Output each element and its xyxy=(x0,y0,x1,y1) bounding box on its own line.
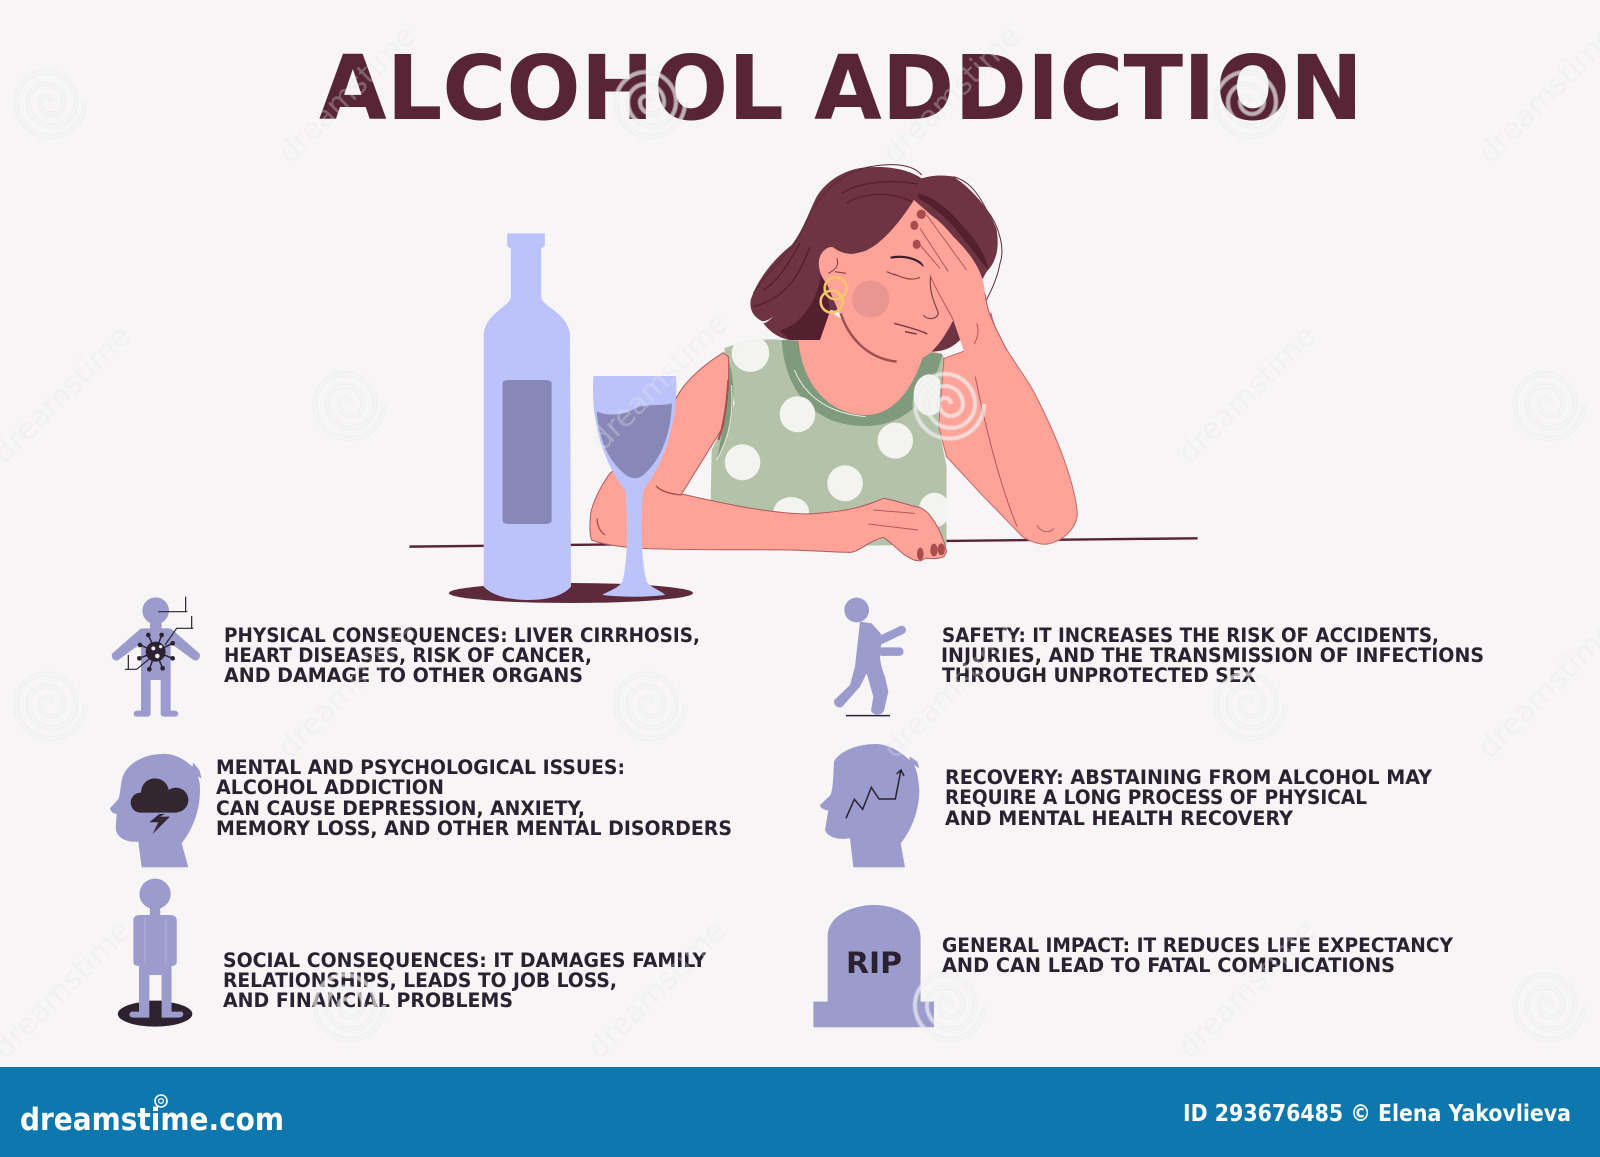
head xyxy=(819,176,1020,377)
text: physical consequences: AND DAMAGE TO OTHER ORGANS xyxy=(224,664,583,687)
polka dots xyxy=(725,335,950,527)
icon: head with rising chart xyxy=(820,744,919,867)
right hair section xyxy=(917,176,997,272)
virus xyxy=(137,633,175,672)
jaw shadow xyxy=(841,313,897,362)
arm detail lines xyxy=(975,377,1054,532)
face xyxy=(819,200,967,362)
mouth xyxy=(894,323,927,334)
watermark overlay: dreamstime xyxy=(271,18,423,171)
text: mental and psychological issues: CAN CAUSE DEPRESSION, ANXIETY, xyxy=(216,797,585,820)
text: recovery: REQUIRE A LONG PROCESS OF PHYSICAL xyxy=(945,786,1367,809)
text: recovery xyxy=(945,766,1433,830)
watermark overlay: dreamstime xyxy=(581,913,733,1066)
text: social consequences: SOCIAL CONSEQUENCES: IT DAMAGES FAMILY xyxy=(223,949,707,972)
watermark overlay: dreamstime xyxy=(1171,913,1323,1066)
watermark overlay: dreamstime xyxy=(876,613,1028,766)
table line xyxy=(409,538,1198,547)
pointer lines xyxy=(125,597,193,669)
icon: stumbling person xyxy=(834,598,902,716)
front fringe xyxy=(833,179,917,253)
icon: body with virus xyxy=(112,597,200,717)
text: social consequences: RELATIONSHIPS, LEADS TO JOB LOSS, xyxy=(223,969,617,992)
text: general impact xyxy=(942,934,1454,977)
text: social consequences xyxy=(223,949,707,1012)
nose xyxy=(923,277,938,319)
text: safety: THROUGH UNPROTECTED SEX xyxy=(942,664,1256,687)
table shadow xyxy=(449,583,693,603)
text: safety: INJURIES, AND THE TRANSMISSION OF INFECTIONS xyxy=(941,644,1484,667)
wine glass xyxy=(593,376,676,597)
woman xyxy=(590,165,1077,561)
icon: tombstone: RIP xyxy=(846,946,902,980)
right side arm xyxy=(939,313,1077,544)
watermark overlay: dreamstime xyxy=(1171,318,1323,471)
watermark overlay: dreamstime xyxy=(584,305,736,458)
sleeveless top xyxy=(711,339,947,547)
footer logo: dreamstime.com xyxy=(20,1102,284,1138)
watermark overlay: dreamstime xyxy=(271,613,423,766)
icon: head with storm cloud xyxy=(110,754,202,867)
illustration: woman at table with wine xyxy=(409,165,1198,603)
text: safety: SAFETY: IT INCREASES THE RISK OF ACCIDENTS, xyxy=(942,624,1439,647)
text: physical consequences xyxy=(224,624,700,687)
icon: person in a hole xyxy=(118,879,192,1027)
blush xyxy=(852,280,889,318)
text: general impact: GENERAL IMPACT: IT REDUCES LIFE EXPECTANCY xyxy=(942,934,1454,957)
top neckline band xyxy=(782,340,942,426)
text: general impact: AND CAN LEAD TO FATAL COMPLICATIONS xyxy=(942,954,1395,977)
text: mental and psychological issues: MEMORY LOSS, AND OTHER MENTAL DISORDERS xyxy=(216,817,732,840)
nails on forehead xyxy=(910,210,926,249)
back hair xyxy=(750,165,1002,352)
text: physical consequences: PHYSICAL CONSEQUENCES: LIVER CIRRHOSIS, xyxy=(224,624,700,647)
hand on forehead xyxy=(909,210,1020,377)
wine bottle xyxy=(484,233,571,600)
storm cloud xyxy=(131,778,188,834)
resting arm and hand xyxy=(590,353,947,561)
text: social consequences: AND FINANCIAL PROBLEMS xyxy=(223,989,513,1012)
title: ALCOHOL ADDICTION xyxy=(319,36,1363,140)
neck and chest xyxy=(782,312,941,425)
watermark overlay: dreamstime xyxy=(876,18,1028,171)
icon: tombstone xyxy=(813,905,934,1027)
nails on table xyxy=(917,543,945,560)
ear lines xyxy=(828,258,846,273)
text: recovery: AND MENTAL HEALTH RECOVERY xyxy=(945,807,1294,830)
footer bar xyxy=(0,1067,1600,1157)
text: safety xyxy=(941,624,1484,687)
text: physical consequences: HEART DISEASES, RISK OF CANCER, xyxy=(224,644,592,667)
text: recovery: RECOVERY: ABSTAINING FROM ALCOHOL MAY xyxy=(945,766,1433,789)
text: mental and psychological issues: ALCOHOL ADDICTION xyxy=(216,776,444,799)
earrings xyxy=(821,277,847,313)
text: mental and psychological issues: MENTAL AND PSYCHOLOGICAL ISSUES: xyxy=(216,756,625,779)
torso xyxy=(711,312,950,547)
closed eye and brow xyxy=(891,257,924,266)
text: mental and psychological issues xyxy=(216,756,732,840)
